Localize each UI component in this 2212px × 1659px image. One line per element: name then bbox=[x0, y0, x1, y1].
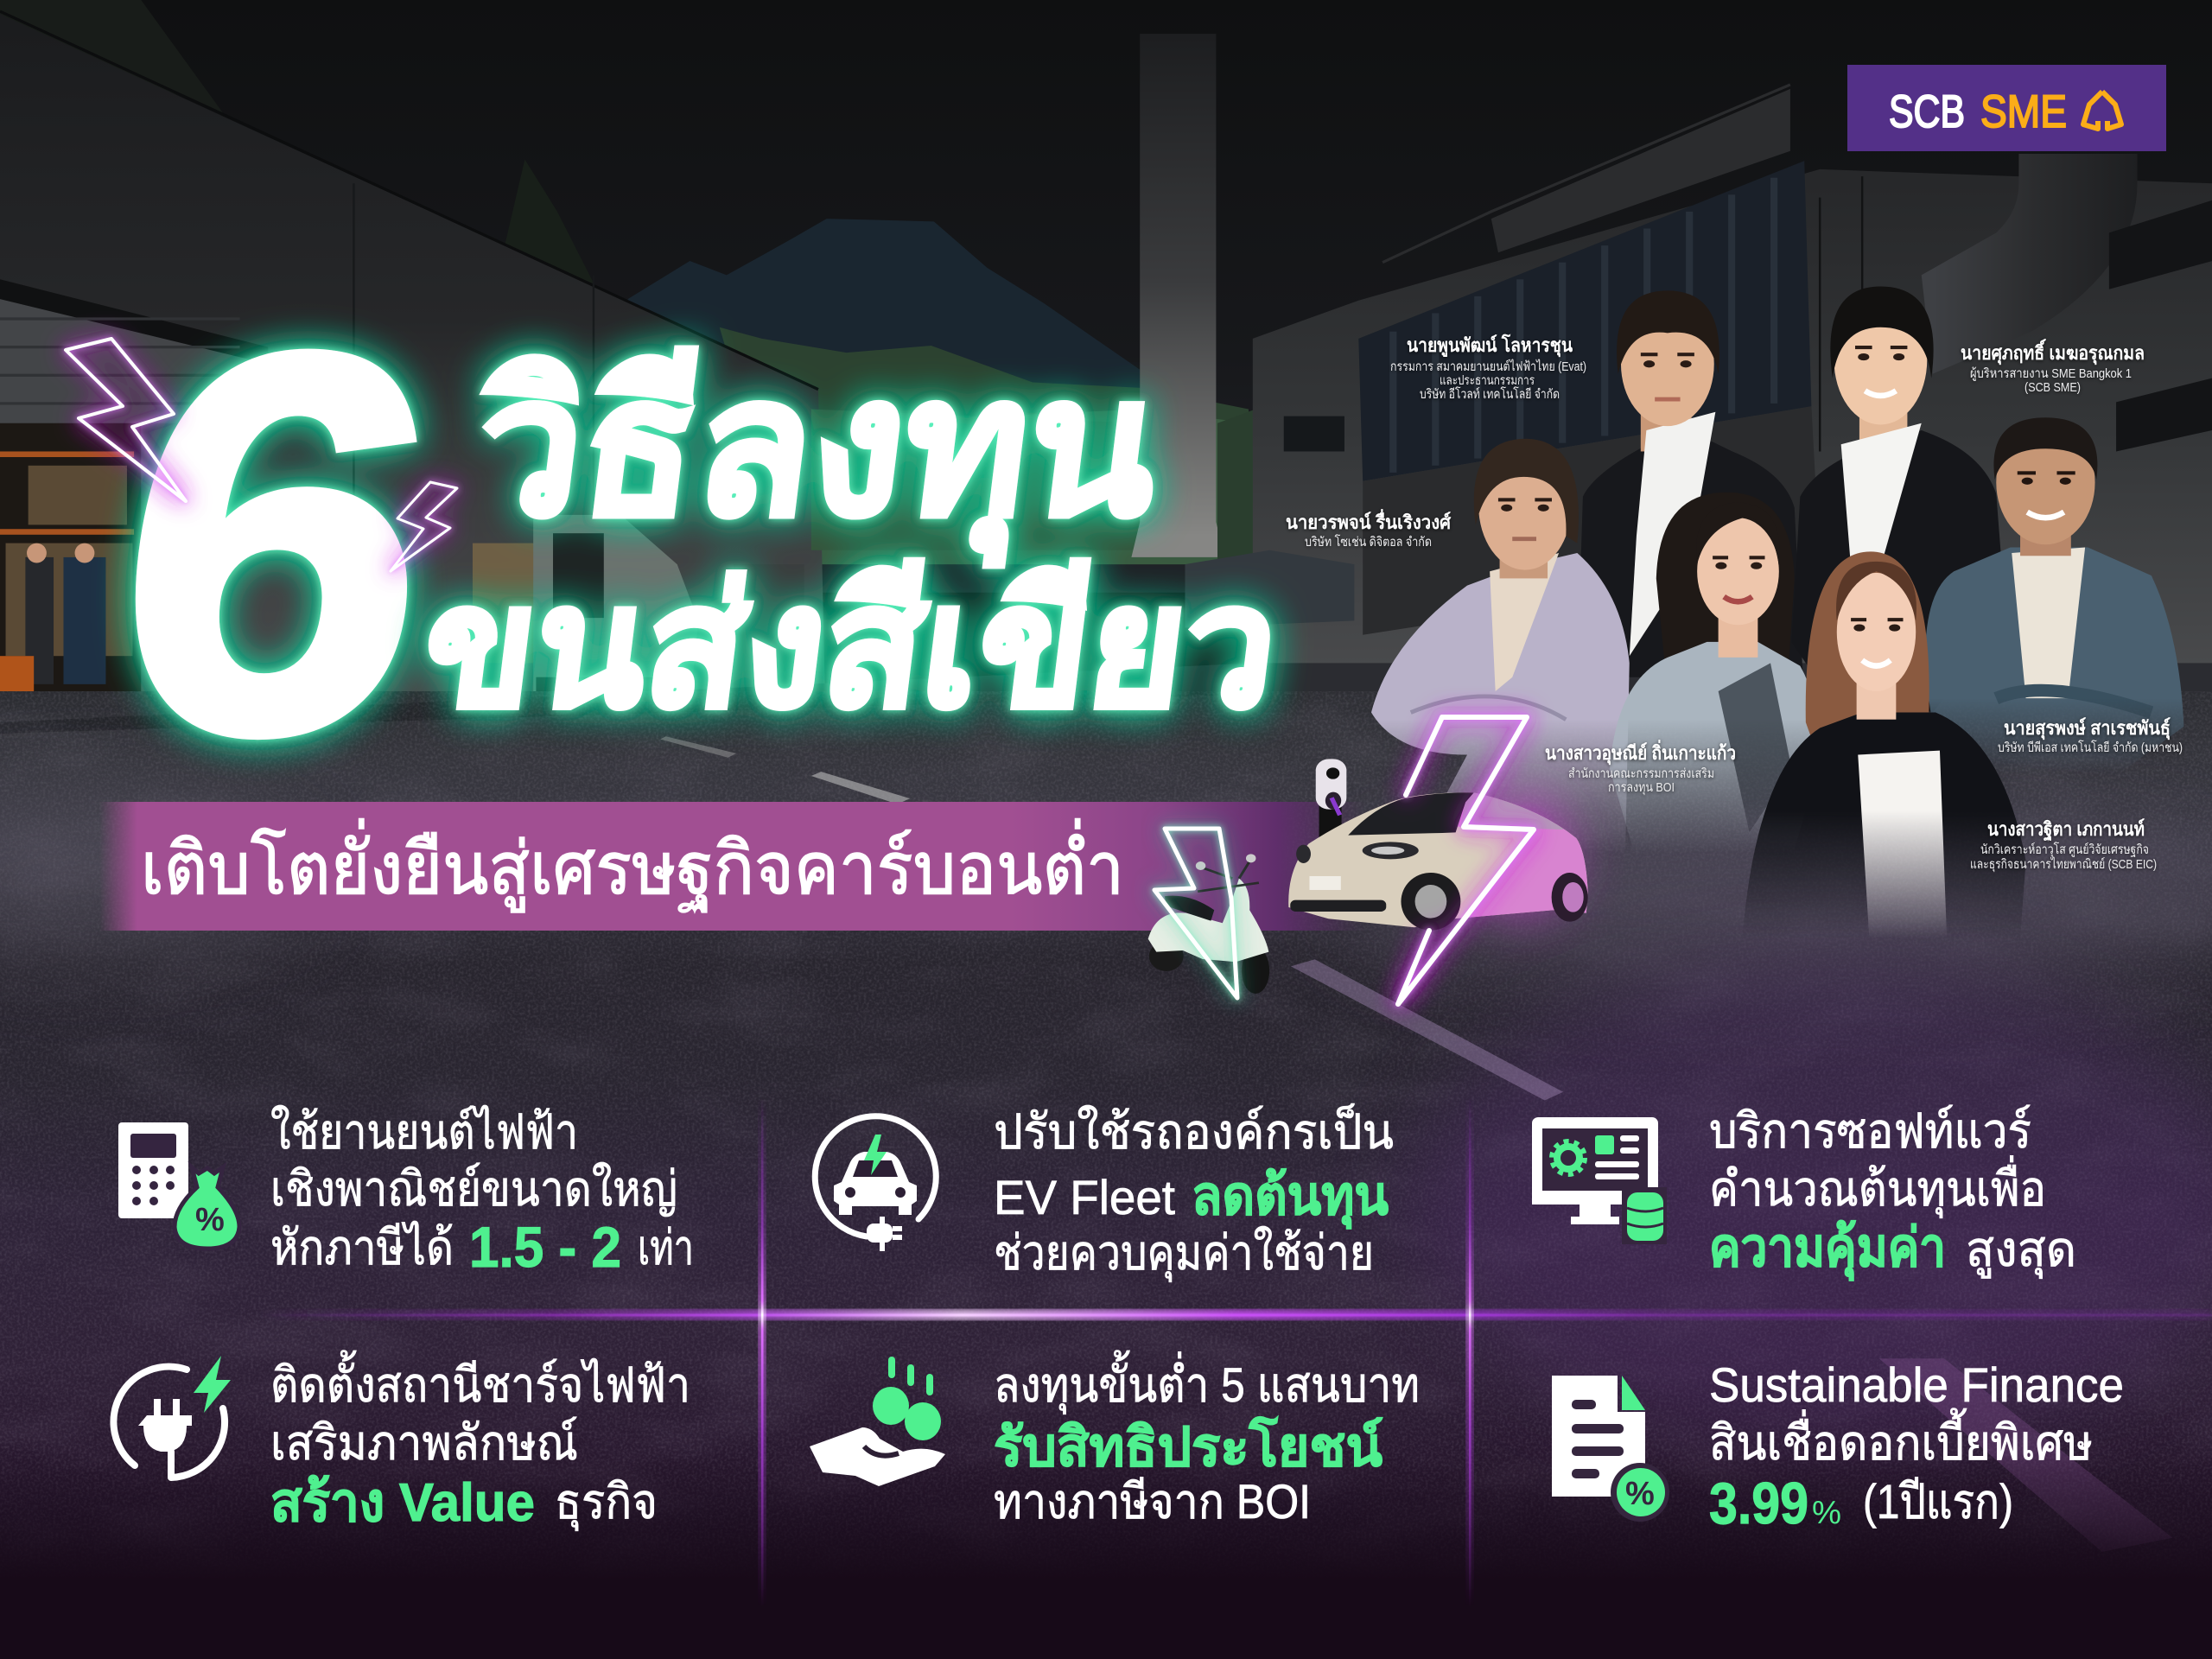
label: Usanee Thinkohkaew bbox=[1545, 739, 1736, 796]
text block: ติดตั้งสถานีชาร์จไฟฟ้า bbox=[270, 1351, 690, 1412]
lightning bolt: purple beside the 6, small bbox=[391, 482, 457, 571]
logo: SCB SME: SCB bbox=[1889, 86, 1965, 137]
logo: SCB SME bbox=[1847, 65, 2166, 151]
label: Poonpat Loharachun: นายพูนพัฒน์ โลหารชุน bbox=[1407, 334, 1573, 358]
label: Usanee Thinkohkaew: นางสาวอุษณีย์ ถิ่นเกาะแก้ว bbox=[1545, 739, 1736, 766]
speaker name labels bbox=[1286, 334, 2183, 873]
text block bbox=[1709, 1357, 2124, 1536]
text block: EV Fleet bbox=[994, 1170, 1175, 1224]
text block: บริการซอฟท์แวร์ bbox=[1709, 1103, 2031, 1158]
text block: สร้าง Value bbox=[270, 1473, 535, 1533]
text block: สูงสุด bbox=[1966, 1222, 2076, 1279]
label: Usanee Thinkohkaew: การลงทุน BOI bbox=[1608, 780, 1675, 796]
title: two lines of Thai text: ขนส่งสีเขียว bbox=[414, 554, 1288, 741]
text block: ลงทุนขั้นต่ำ 5 แสนบาท bbox=[994, 1351, 1420, 1414]
label: Thita Phekanon: นักวิเคราะห์อาวุโส ศูนย์วิจัยเศรษฐกิจ bbox=[1980, 842, 2149, 858]
label: Thita Phekanon bbox=[1970, 818, 2157, 873]
text block: เท่า bbox=[638, 1220, 694, 1274]
text block: (1ปีแรก) bbox=[1863, 1474, 2013, 1529]
label: Thita Phekanon: และธุรกิจธนาคารไทยพาณิชย์ (SCB EIC) bbox=[1970, 856, 2157, 873]
icon: document with percent bbox=[1552, 1376, 1669, 1522]
person: man in lilac blazer bbox=[1371, 439, 1630, 861]
label: Thita Phekanon: นางสาวฐิตา เภกานนท์ bbox=[1987, 818, 2145, 842]
feature: commercial EV tax deduction bbox=[118, 1104, 694, 1279]
person: man in blue-grey suit bbox=[1925, 417, 2183, 776]
icon: monitor with gear and database bbox=[1532, 1117, 1667, 1244]
text block bbox=[994, 1351, 1420, 1529]
text block: ทางภาษีจาก BOI bbox=[994, 1474, 1311, 1529]
label: Woraphot Ruenroengwong bbox=[1286, 508, 1452, 550]
icon: document with percent: % bbox=[1625, 1476, 1655, 1512]
text block: ช่วยควบคุมค่าใช้จ่าย bbox=[994, 1225, 1374, 1282]
title: two lines of Thai text bbox=[414, 340, 1288, 741]
label: Surapong Sarechaphan bbox=[1998, 717, 2183, 755]
lightning bolt: magenta over car bbox=[1398, 717, 1534, 1004]
text block: เสริมภาพลักษณ์ bbox=[270, 1415, 578, 1470]
text block: 3.99 bbox=[1709, 1471, 1808, 1536]
text block: ธุรกิจ bbox=[555, 1474, 658, 1531]
text block: ปรับใช้รถองค์กรเป็น bbox=[994, 1103, 1394, 1159]
text block: ลดต้นทุน bbox=[1192, 1166, 1389, 1229]
title: two lines of Thai text: วิธีลงทุน bbox=[461, 340, 1171, 567]
text block: 1.5 - 2 bbox=[469, 1215, 621, 1279]
label: Poonpat Loharachun bbox=[1390, 334, 1586, 402]
illustration: EV charger and car bbox=[1288, 759, 1588, 930]
text block bbox=[1709, 1103, 2076, 1281]
label: Poonpat Loharachun: และประธานกรรมการ bbox=[1440, 373, 1535, 388]
text block: รับสิทธิประโยชน์ bbox=[994, 1415, 1383, 1478]
icon: calculator and money bag: % bbox=[195, 1202, 225, 1238]
text block: สินเชื่อดอกเบี้ยพิเศษ bbox=[1709, 1408, 2093, 1470]
label: Poonpat Loharachun: กรรมการ สมาคมยานยนต์ไฟฟ้าไทย (Evat) bbox=[1390, 359, 1586, 374]
lightning bolt: purple beside the 6, large bbox=[66, 339, 186, 501]
icon: EV car in charging loop bbox=[815, 1116, 936, 1251]
illustration: electric scooter bbox=[1148, 854, 1269, 994]
magenta glow behind car bolt bbox=[1469, 795, 1573, 916]
text block bbox=[270, 1351, 690, 1533]
lightning bolt: teal over scooter bbox=[1154, 829, 1237, 998]
text block: % bbox=[1812, 1495, 1841, 1531]
text block: ความคุ้มค่า bbox=[1709, 1218, 1946, 1281]
text block: คำนวณต้นทุนเพื่อ bbox=[1709, 1155, 2046, 1218]
person: man in black suit, back right bbox=[1792, 286, 2006, 713]
label: Poonpat Loharachun: บริษัท อีโวลท์ เทคโนโลยี จำกัด bbox=[1420, 386, 1560, 402]
feature: software for cost calculation bbox=[1532, 1103, 2076, 1281]
text block: Sustainable Finance bbox=[1709, 1357, 2124, 1412]
label: Woraphot Ruenroengwong: บริษัท โซเช่น ดิจิตอล จำกัด bbox=[1305, 534, 1432, 550]
person: woman in black suit, front bbox=[1742, 551, 2026, 938]
label: Supphakrit Mekarunkamol bbox=[1961, 339, 2145, 395]
team photo group bbox=[1371, 286, 2183, 938]
feature: EV fleet bbox=[815, 1103, 1394, 1282]
text block: ใช้ยานยนต์ไฟฟ้า bbox=[270, 1104, 578, 1159]
grid flare lines bbox=[259, 1097, 2212, 1607]
feature: sustainable finance bbox=[1552, 1357, 2124, 1536]
text block: เชิงพาณิชย์ขนาดใหญ่ bbox=[270, 1161, 677, 1217]
label: Supphakrit Mekarunkamol: (SCB SME) bbox=[2024, 380, 2081, 395]
label: Surapong Sarechaphan: นายสุรพงษ์ สาเรชพันธุ์ bbox=[2004, 717, 2171, 741]
feature: BOI minimum investment bbox=[810, 1351, 1420, 1529]
person: man in black suit, back left bbox=[1577, 290, 1803, 677]
subtitle ribbon bbox=[99, 802, 1365, 931]
text block bbox=[270, 1104, 694, 1279]
logo: SCB SME: SME bbox=[1980, 86, 2067, 137]
subtitle ribbon: เติบโตยั่งยืนสู่เศรษฐกิจคาร์บอนต่ำ bbox=[141, 818, 1124, 912]
feature: charging station bbox=[113, 1351, 690, 1533]
person: woman in grey blazer bbox=[1610, 493, 1818, 861]
icon: hand holding coins bbox=[810, 1357, 945, 1486]
icon: calculator and money bag bbox=[118, 1122, 239, 1249]
label: Supphakrit Mekarunkamol: นายศุภฤทธิ์ เมฆอรุณกมล bbox=[1961, 339, 2145, 365]
icon: plug with bolt bbox=[113, 1356, 231, 1478]
title number 6: 6 bbox=[87, 241, 466, 845]
text block bbox=[994, 1103, 1394, 1282]
text block: หักภาษีได้ bbox=[270, 1220, 454, 1274]
label: Usanee Thinkohkaew: สำนักงานคณะกรรมการส่งเสริม bbox=[1568, 766, 1714, 781]
label: Woraphot Ruenroengwong: นายวรพจน์ รื่นเริงวงศ์ bbox=[1286, 508, 1452, 533]
label: Supphakrit Mekarunkamol: ผู้บริหารสายงาน SME Bangkok 1 bbox=[1970, 366, 2132, 381]
